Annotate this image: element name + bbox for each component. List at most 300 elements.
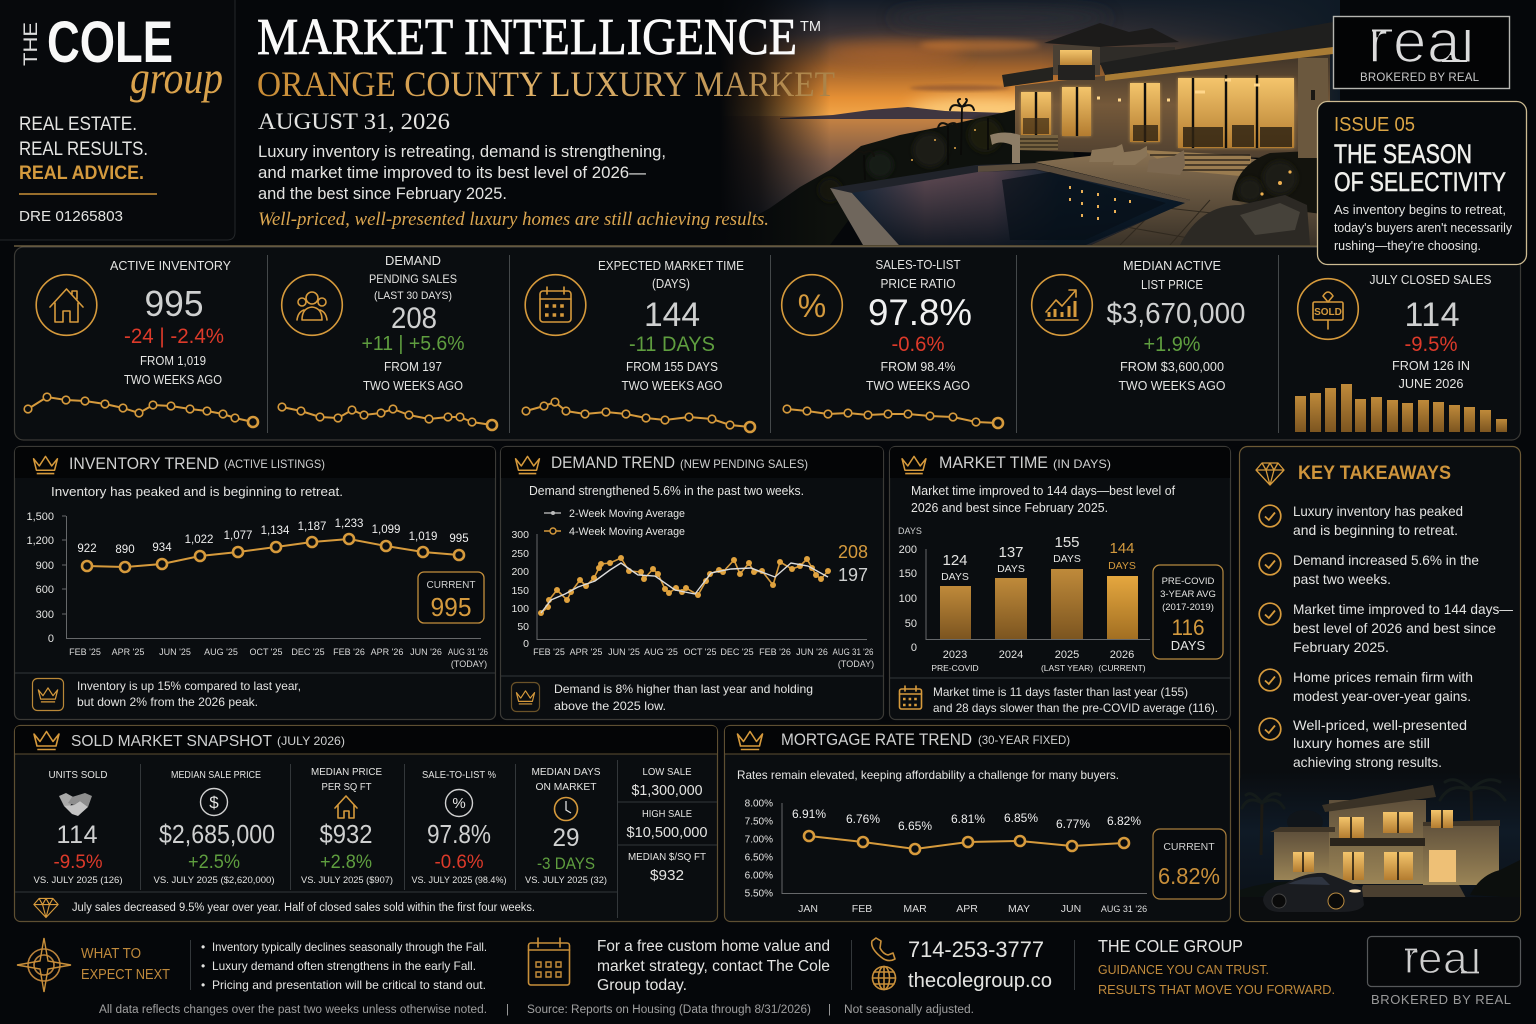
icon: crown: [34, 456, 57, 474]
line chart: active listings: DEC '25: [291, 647, 325, 657]
KPI: sales-to-list ratio: 97.8%: [868, 292, 972, 333]
bar chart: market time by year: 100: [899, 593, 917, 605]
panel: key takeaways: [1240, 446, 1520, 922]
heading: (ACTIVE LISTINGS): [224, 457, 325, 471]
text: note: Market time is 11 days faster than last year (155): [933, 685, 1188, 699]
icon: house: [335, 796, 357, 818]
heading: MORTGAGE RATE TREND: [781, 731, 972, 749]
callout: pre-covid average: 3-YEAR AVG: [1160, 589, 1216, 600]
footnote: |: [828, 1004, 831, 1016]
line chart: active listings: 1,500: [26, 511, 54, 523]
bar chart: market time by year: 2025: [1055, 649, 1079, 661]
KPI: expected market time: [525, 258, 750, 427]
takeaway 5: achieving strong results.: [1293, 754, 1442, 770]
takeaway 1: Luxury inventory has peaked: [1293, 503, 1463, 519]
text: summary: Rates remain elevated, keeping affordability a challenge for many buyers.: [737, 768, 1119, 782]
takeaway 4: modest year-over-year gains.: [1293, 688, 1471, 704]
heading: INVENTORY TREND: [69, 454, 219, 473]
bar chart: market time by year: (LAST YEAR): [1041, 663, 1093, 673]
tagline: REAL ADVICE.: [19, 163, 144, 184]
KPI: demand: PENDING SALES: [369, 272, 457, 286]
stat: median days on market: 29: [552, 824, 580, 852]
text: call to action: market strategy, contact The Cole: [597, 958, 830, 975]
stat: sale-to-list: -0.6%: [434, 852, 484, 873]
bar chart: market time by year: 50: [905, 618, 917, 630]
line chart: active listings: AUG 31 '26: [448, 647, 488, 657]
takeaway 5: luxury homes are still: [1293, 735, 1430, 751]
heading: WHAT TO: [81, 945, 141, 962]
stat: units sold: [34, 769, 123, 885]
line chart: mortgage rate: 6.76%: [846, 812, 880, 826]
stat: median days on market: MEDIAN DAYS: [532, 766, 600, 778]
hero photo: oceanfront luxury house at sunset: [720, 0, 1340, 245]
takeaway 3: [1259, 601, 1513, 655]
line chart: active listings: 1,134: [261, 525, 290, 537]
line chart: pending sales: 300: [511, 529, 529, 541]
stat: median days on market: -3 DAYS: [537, 854, 595, 873]
heading: [69, 454, 325, 473]
stat: median price per sq ft: [301, 766, 393, 885]
line chart: pending sales: 208: [838, 542, 868, 562]
bar chart: market time by year: 137: [998, 544, 1024, 561]
line chart: mortgage rate: 7.00%: [745, 834, 773, 846]
icon: people: [282, 275, 342, 335]
heading: (30-YEAR FIXED): [978, 733, 1070, 747]
line chart: mortgage rate: MAR: [903, 903, 927, 915]
italic claim: Well-priced, well-presented luxury homes are still achieving results.: [258, 209, 769, 230]
callout: pre-covid average: (2017-2019): [1162, 602, 1214, 613]
KPI: July closed sales: 114: [1404, 296, 1460, 334]
bar chart: market time by year: PRE-COVID: [931, 663, 979, 673]
bar chart: market time by year: 124: [942, 552, 968, 569]
KPI: demand: +11 | +5.6%: [362, 333, 465, 355]
icon: sold sign: SOLD: [1314, 307, 1342, 318]
line chart: mortgage rate: 6.00%: [745, 870, 773, 882]
panel: inventory trend: [14, 446, 496, 720]
line chart: active listings: OCT '25: [249, 647, 283, 657]
KPI: median active list price: [1032, 258, 1246, 393]
text: call to action: For a free custom home value and: [597, 938, 830, 955]
stat list: sale range: LOW SALE: [642, 766, 692, 778]
line chart: active listings: [26, 511, 488, 669]
panel: brand block: [0, 0, 235, 240]
heading: SOLD MARKET SNAPSHOT: [71, 733, 272, 750]
KPI: active inventory: ACTIVE INVENTORY: [110, 258, 231, 273]
icon: crown: [34, 732, 59, 750]
takeaway 3: Market time improved to 144 days—: [1293, 601, 1513, 617]
footer: company slogan: RESULTS THAT MOVE YOU FORWARD.: [1098, 983, 1335, 997]
KPI: sales-to-list ratio: PRICE RATIO: [880, 277, 956, 291]
takeaway 2: [1259, 552, 1479, 587]
stat: median sale price: MEDIAN SALE PRICE: [171, 769, 261, 781]
text: summary: Inventory has peaked and is beginning to retreat.: [51, 484, 343, 499]
bar chart: market time by year: (CURRENT): [1098, 663, 1146, 673]
footer: company slogan: GUIDANCE YOU CAN TRUST.: [1098, 963, 1269, 977]
line chart: pending sales: 100: [511, 603, 529, 615]
stat: units sold: UNITS SOLD: [48, 769, 108, 781]
callout: current value: 995: [430, 592, 472, 622]
line chart: active listings: JUN '26: [410, 647, 442, 657]
list: expectations: •: [201, 978, 205, 992]
line chart: active listings: 600: [36, 584, 54, 596]
line chart: active listings: 1,187: [298, 521, 326, 533]
KPI: sales-to-list ratio: TWO WEEKS AGO: [866, 379, 970, 393]
takeaway 4: [1259, 669, 1473, 704]
icon: percent: %: [798, 288, 826, 324]
stat: sale-to-list: [412, 769, 506, 885]
line chart: pending sales: 200: [511, 566, 529, 578]
list: expectations: [201, 940, 487, 992]
heading: KEY TAKEAWAYS: [1298, 463, 1451, 484]
icon: clock: [554, 798, 578, 820]
logo box: real brokered by real: [1334, 8, 1510, 88]
line chart: active listings: 934: [152, 542, 172, 554]
windows: [1060, 50, 1092, 65]
line chart: active listings: 300: [36, 609, 54, 621]
subtitle: ORANGE COUNTY LUXURY MARKET: [257, 64, 835, 104]
logo box: footer real logo: BROKERED BY REAL: [1371, 992, 1511, 1007]
callout: current value: [418, 572, 484, 623]
line chart: active listings: 890: [115, 544, 135, 556]
line chart: pending sales: OCT '25: [683, 647, 717, 657]
stat list: sale range: HIGH SALE: [642, 808, 692, 820]
heading: (JULY 2026): [277, 734, 345, 748]
intro paragraph: and the best since February 2025.: [258, 185, 507, 203]
panel: KPI row: [14, 246, 1520, 440]
text: note: [554, 682, 813, 713]
line chart: mortgage rate: 5.50%: [745, 888, 773, 900]
KPI: sales-to-list ratio: [782, 258, 998, 423]
line chart: mortgage rate: JAN: [798, 903, 818, 915]
line chart: mortgage rate: 6.85%: [1004, 811, 1038, 825]
list: expectations: Pricing and presentation will be critical to stand out.: [212, 978, 486, 992]
panel: mortgage rate trend: [724, 726, 1230, 922]
KPI: active inventory: TWO WEEKS AGO: [124, 373, 222, 387]
takeaway 2: Demand increased 5.6% in the: [1293, 552, 1479, 568]
KPI: July closed sales: JUNE 2026: [1398, 377, 1464, 391]
line chart: active listings: 995: [449, 533, 469, 545]
line chart: active listings: APR '26: [371, 647, 403, 657]
line chart: active listings: JUN '25: [159, 647, 191, 657]
text: call to action: [597, 938, 830, 994]
line chart: mortgage rate: 6.50%: [745, 852, 773, 864]
KPI: sales-to-list ratio: -0.6%: [892, 333, 944, 356]
text: note: July sales decreased 9.5% year over year. Half of closed sales sold within the first four weeks.: [72, 902, 535, 914]
takeaway 1: and is beginning to retreat.: [1293, 522, 1458, 538]
heading: (IN DAYS): [1053, 457, 1111, 471]
icon: crown: [738, 732, 762, 750]
logo: The Cole Group: [21, 10, 223, 103]
callout: issue 05: ISSUE 05: [1334, 114, 1415, 136]
line chart: mortgage rate: [745, 798, 1147, 915]
heading: DEMAND TREND: [551, 453, 675, 472]
bar chart: market time by year: DAYS: [1053, 553, 1081, 565]
icon: compass: [17, 938, 71, 992]
takeaway 5: Well-priced, well-presented: [1293, 717, 1467, 733]
line chart: active listings: 1,200: [26, 535, 54, 547]
callout: issue 05: As inventory begins to retreat,: [1334, 203, 1506, 217]
bar chart: market time by year: 2023: [943, 649, 967, 661]
legend: [544, 508, 685, 538]
takeaway 2: past two weeks.: [1293, 571, 1391, 587]
text: summary: [911, 484, 1176, 515]
bar chart: market time by year: 2026: [1110, 649, 1134, 661]
line chart: pending sales: DEC '25: [720, 647, 754, 657]
icon: crown badge: [32, 678, 64, 710]
heading: (NEW PENDING SALES): [680, 457, 808, 471]
line chart: mortgage rate: 6.81%: [951, 812, 985, 826]
bar chart: market time by year: DAYS: [941, 571, 969, 583]
intro paragraph: and market time improved to its best level of 2026—: [258, 164, 646, 182]
text: call to action: Group today.: [597, 977, 687, 994]
line chart: mortgage rate: AUG 31 '26: [1101, 904, 1147, 914]
list: expectations: •: [201, 959, 205, 973]
footer: contact details: [872, 937, 1052, 992]
line chart: pending sales: FEB '26: [759, 647, 791, 657]
KPI: expected market time: FROM 155 DAYS: [626, 360, 718, 374]
callout: issue 05: THE SEASON: [1334, 139, 1472, 169]
KPI: July closed sales: -9.5%: [1404, 333, 1458, 356]
trademark: TM: [800, 18, 821, 35]
pool: [830, 163, 1190, 245]
logo box: footer real logo: real: [1404, 934, 1481, 983]
icon: house: [36, 275, 97, 335]
garden and sofa: [1232, 152, 1317, 214]
stat: sale-to-list: VS. JULY 2025 (98.4%): [412, 875, 506, 885]
tagline: REAL ESTATE.: [19, 114, 137, 135]
line chart: pending sales: 0: [523, 638, 529, 650]
text: note: Demand is 8% higher than last year and holding: [554, 682, 813, 696]
line chart: active listings: (TODAY): [451, 659, 487, 669]
stat: median sale price: $2,685,000: [159, 819, 275, 849]
line chart: mortgage rate: APR: [956, 903, 978, 915]
line chart: mortgage rate: 6.65%: [898, 819, 932, 833]
callout: current rate: 6.82%: [1158, 863, 1220, 889]
line chart: active listings: AUG '25: [204, 647, 238, 657]
logo box: real brokered by real: BROKERED BY REAL: [1360, 72, 1480, 84]
bar chart: market time by year: 150: [899, 568, 917, 580]
icon: rising chart: [1032, 275, 1092, 335]
icon: phone: [872, 938, 895, 961]
icon: calendar: [525, 275, 586, 335]
takeaway 4: Home prices remain firm with: [1293, 669, 1473, 685]
line chart: pending sales: 250: [511, 548, 529, 560]
line chart: active listings: FEB '25: [69, 647, 101, 657]
footnote: Source: Reports on Housing (Data through 8/31/2026): [527, 1004, 811, 1016]
line chart: active listings: 1,099: [372, 524, 400, 536]
bar chart: market time by year: DAYS: [898, 526, 922, 536]
lounge chairs: [1089, 144, 1147, 165]
stat: sale-to-list: 97.8%: [427, 819, 491, 849]
KPI: expected market time: -11 DAYS: [629, 333, 715, 356]
stat: median sale price: [154, 769, 275, 885]
bar chart: market time by year: 144: [1109, 540, 1135, 557]
text: summary: 2026 and best since February 2025.: [911, 501, 1108, 515]
icon: calendar: [528, 938, 570, 985]
callout: issue 05: rushing—they're choosing.: [1334, 239, 1481, 253]
footnote: |: [506, 1004, 509, 1016]
bar chart: market time by year: 200: [899, 544, 917, 556]
stat: median price per sq ft: PER SQ FT: [322, 781, 372, 793]
text: summary: Market time improved to 144 days—best level of: [911, 484, 1176, 498]
line chart: active listings: 900: [36, 560, 54, 572]
KPI: median active list price: TWO WEEKS AGO: [1118, 379, 1226, 393]
callout: issue 05: today's buyers aren't necessarily: [1334, 221, 1513, 235]
footnote: [99, 1004, 974, 1016]
sparkline: [28, 397, 253, 422]
KPI: expected market time: TWO WEEKS AGO: [622, 379, 723, 393]
date: AUGUST 31, 2026: [258, 109, 450, 134]
takeaway 3: best level of 2026 and best since: [1293, 620, 1496, 636]
KPI: median active list price: $3,670,000: [1106, 298, 1246, 330]
KPI: expected market time: 144: [644, 296, 700, 334]
footnote: Not seasonally adjusted.: [844, 1004, 974, 1016]
logo: The Cole Group: COLE: [47, 10, 173, 75]
stat: units sold: 114: [56, 821, 98, 849]
bar chart: market time by year: [898, 526, 1150, 673]
tagline: [19, 114, 148, 184]
sparkline: [526, 402, 750, 427]
line chart: pending sales: AUG '25: [644, 647, 678, 657]
KPI: July closed sales: [1295, 272, 1507, 432]
legend: 2-Week Moving Average: [569, 508, 685, 520]
bar chart: market time by year: 0: [911, 642, 917, 654]
text: summary: Demand strengthened 5.6% in the past two weeks.: [529, 484, 804, 498]
intro paragraph: [258, 143, 666, 203]
footer: contact prompt: [528, 938, 830, 994]
icon: crown: [902, 456, 926, 474]
callout: pre-covid average: 116: [1172, 615, 1204, 640]
callout: pre-covid average: PRE-COVID: [1162, 576, 1215, 587]
icon: dollar: $: [209, 793, 219, 812]
text: note: [933, 685, 1218, 715]
line chart: pending sales: 50: [517, 621, 529, 633]
KPI: active inventory: 995: [144, 283, 204, 324]
stat list: sale range: $932: [650, 867, 684, 884]
text: note: and 28 days slower than the pre-COVID average (116).: [933, 701, 1218, 715]
line chart: pending sales: [511, 529, 874, 669]
callout: current rate: [1153, 829, 1226, 899]
bar chart: market time by year: DAYS: [997, 563, 1025, 575]
footer: company slogan: THE COLE GROUP: [1098, 936, 1243, 956]
line chart: active listings: APR '25: [112, 647, 144, 657]
stat: median sale price: VS. JULY 2025 ($2,620,000): [154, 875, 274, 885]
text: note: Inventory is up 15% compared to last year,: [77, 679, 301, 693]
stat: median price per sq ft: $932: [320, 819, 372, 849]
icon: percent: [782, 275, 842, 335]
KPI: demand: (LAST 30 DAYS): [374, 290, 452, 302]
heading: MARKET TIME: [939, 453, 1048, 472]
takeaway 3: February 2025.: [1293, 639, 1389, 655]
line chart: pending sales: FEB '25: [533, 647, 565, 657]
line chart: pending sales: JUN '26: [796, 647, 828, 657]
bar chart: market time by year: 155: [1054, 534, 1080, 551]
stat list: sale range: $1,300,000: [632, 783, 702, 799]
line chart: active listings: 1,077: [224, 530, 252, 542]
sparkline: [787, 409, 998, 423]
KPI: active inventory: [28, 258, 253, 422]
heading: EXPECT NEXT: [81, 966, 170, 983]
line chart: active listings: 1,022: [185, 534, 213, 546]
KPI: demand: FROM 197: [384, 360, 442, 374]
list: expectations: •: [201, 940, 205, 954]
stat: median price per sq ft: MEDIAN PRICE: [311, 766, 382, 778]
stat: median days on market: ON MARKET: [536, 781, 597, 793]
licence number: DRE 01265803: [19, 208, 123, 225]
tagline: REAL RESULTS.: [19, 139, 148, 160]
legend: 4-Week Moving Average: [569, 526, 685, 538]
image: night house and car: [1240, 772, 1520, 921]
logo box: footer real logo: [1368, 934, 1520, 1007]
KPI: expected market time: EXPECTED MARKET TIME: [598, 258, 744, 273]
line chart: mortgage rate: MAY: [1008, 903, 1030, 915]
callout: current value: CURRENT: [427, 580, 475, 591]
line chart: pending sales: AUG 31 '26: [832, 647, 874, 657]
logo box: real brokered by real: real: [1368, 8, 1474, 75]
footer: contact details: 714-253-3777: [908, 937, 1044, 962]
line chart: mortgage rate: 7.50%: [745, 816, 773, 828]
line chart: mortgage rate: 6.82%: [1107, 814, 1141, 828]
icon: handshake: [59, 793, 92, 816]
icon: sold sign: [1298, 279, 1358, 339]
line chart: mortgage rate: JUN: [1061, 903, 1081, 915]
footer: contact details: thecolegroup.co: [908, 970, 1052, 992]
stat: median price per sq ft: VS. JULY 2025 ($907): [301, 875, 393, 885]
KPI: sales-to-list ratio: FROM 98.4%: [880, 360, 956, 374]
stat list: sale range: [626, 766, 708, 884]
line chart: mortgage rate: FEB: [852, 903, 872, 915]
line chart: mortgage rate: 8.00%: [745, 798, 773, 810]
title: MARKET INTELLIGENCE: [257, 9, 797, 66]
panel: sold market snapshot: [14, 726, 718, 922]
callout: pre-covid average: [1153, 565, 1223, 659]
takeaway 1: [1259, 503, 1463, 538]
list: expectations: Luxury demand often strengthens in the early Fall.: [212, 959, 476, 973]
icon: crown: [516, 456, 539, 474]
text: note: but down 2% from the 2026 peak.: [77, 695, 258, 709]
callout: current rate: CURRENT: [1163, 841, 1215, 853]
KPI: demand: TWO WEEKS AGO: [363, 379, 463, 393]
KPI: median active list price: MEDIAN ACTIVE: [1123, 258, 1221, 273]
stat: units sold: -9.5%: [54, 852, 103, 873]
heading: [81, 945, 170, 983]
deck and steps: [1035, 150, 1330, 245]
KPI: active inventory: -24 | -2.4%: [124, 325, 224, 348]
stat: median sale price: +2.5%: [188, 852, 240, 873]
callout: pre-covid average: DAYS: [1171, 638, 1206, 653]
icon: diamond: [34, 898, 58, 918]
stat list: sale range: MEDIAN $/SQ FT: [628, 851, 707, 863]
stat: median days on market: VS. JULY 2025 (32): [525, 875, 607, 885]
footer: company slogan: [1098, 936, 1335, 997]
KPI: active inventory: FROM 1,019: [140, 354, 206, 368]
KPI: demand: [282, 253, 492, 425]
house walls: [1015, 50, 1330, 160]
list: expectations: Inventory typically declines seasonally through the Fall.: [212, 940, 487, 954]
icon: percent: %: [452, 795, 466, 812]
logo: The Cole Group: group: [130, 52, 223, 103]
line chart: active listings: 1,233: [335, 518, 363, 530]
line chart: mortgage rate: 6.77%: [1056, 817, 1090, 831]
panel: market time: [890, 446, 1230, 720]
stat: median days on market: [525, 766, 607, 885]
line chart: active listings: 0: [48, 633, 54, 645]
text: note: above the 2025 low.: [554, 699, 666, 713]
line chart: pending sales: (TODAY): [838, 659, 874, 669]
line chart: active listings: FEB '26: [333, 647, 365, 657]
KPI: median active list price: FROM $3,600,000: [1120, 360, 1224, 374]
panel: demand trend: [500, 446, 884, 720]
